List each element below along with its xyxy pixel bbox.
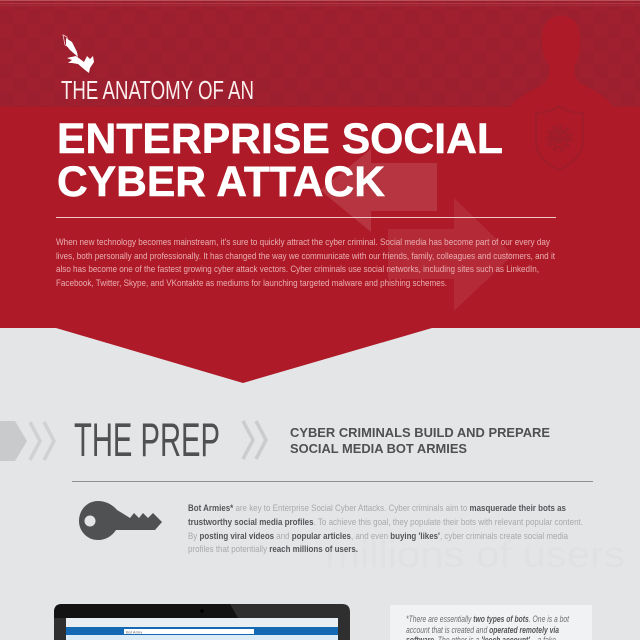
icon: fox logo <box>63 35 94 73</box>
text block: intro: When new technology becomes mainstream, it's sure to quickly attract the cyber criminal. Social media has become part of our every day <box>56 237 550 248</box>
panel: quote on bots: account that is created and operated remotely via <box>406 625 559 635</box>
watermark text: millions of users <box>325 534 625 575</box>
panel: red header <box>0 0 640 383</box>
icon: key <box>79 501 162 540</box>
text block: bot armies: Bot Armies* are key to Enterprise Social Cyber Attacks. Cyber criminals aim to masquerade their bots as <box>188 503 566 514</box>
search box label: Bot Army <box>126 630 142 634</box>
title: CYBER ATTACK <box>57 158 385 206</box>
panel: quote on bots <box>390 605 592 640</box>
panel: quote on bots: *There are essentially two types of bots. One is a bot <box>406 614 569 624</box>
text block: bot armies: trustworthy social media profiles. To achieve this goal, they populate their bots with relevant popular content. <box>188 517 583 528</box>
subheading <box>290 425 550 456</box>
heading: the anatomy of an: THE ANATOMY OF AN <box>61 77 254 105</box>
subheading: CYBER CRIMINALS BUILD AND PREPARE <box>290 425 550 440</box>
checker band <box>0 0 640 107</box>
title: ENTERPRISE SOCIAL <box>57 115 503 163</box>
text block: bot armies: profiles that potentially reach millions of users. <box>188 544 358 555</box>
text block: intro: Facebook, Twitter, Skype, and VKontakte as mediums for launching targeted malware and phishing schemes. <box>56 278 447 289</box>
subheading: SOCIAL MEDIA BOT ARMIES <box>290 441 467 456</box>
icon: translucent arrows <box>320 149 513 311</box>
laptop screen <box>54 604 350 640</box>
text block: intro: also has become one of the fastest growing cyber attack vectors. Cyber criminals use social networks, including sites such as LinkedIn, <box>56 264 539 275</box>
icon: grey section arrow with chevrons <box>0 421 54 461</box>
text block: bot armies <box>188 503 583 555</box>
text block: intro <box>56 237 555 289</box>
icon: person silhouette <box>510 16 613 107</box>
text block: bot armies: By posting viral videos and popular articles, and even buying 'likes', cyber criminals create social media <box>188 531 569 542</box>
title <box>57 115 503 206</box>
icon: shield <box>536 106 583 170</box>
heading: the prep: THE PREP <box>74 413 220 466</box>
icon: chevrons <box>243 421 266 459</box>
text block: intro: lives, both personally and professionally. It has changed the way we communicate with our friends, family, colleagues and customers, and it <box>56 251 555 262</box>
